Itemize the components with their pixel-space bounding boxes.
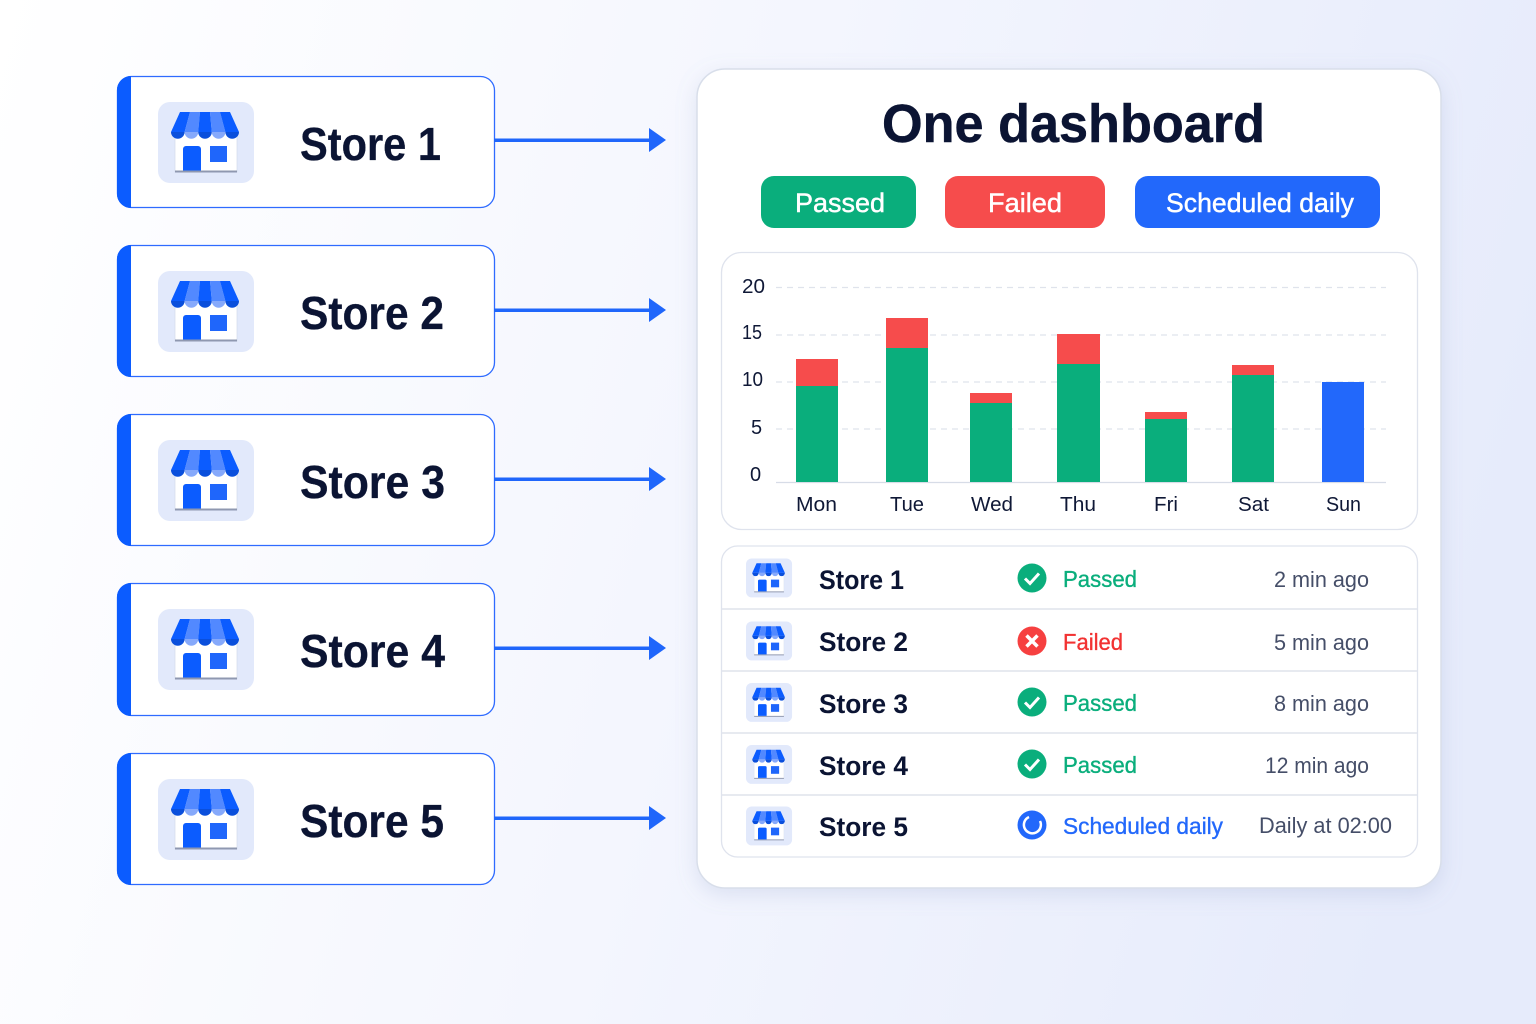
arrow: Store 4 to dashboard — [494, 636, 666, 660]
bars: Fri — [1145, 412, 1187, 482]
x axis labels — [796, 494, 1361, 516]
pill: Scheduled daily — [1135, 176, 1380, 228]
row: Store 3 — [746, 683, 1369, 722]
status table — [722, 546, 1418, 857]
store card: Store 3 — [117, 414, 494, 546]
row: Store 1: Store 1 — [819, 565, 904, 595]
store card: Store 2 — [117, 245, 494, 377]
store card: Store 4 — [117, 583, 494, 716]
row: Store 4: Passed — [1063, 752, 1137, 778]
title: One dashboard — [882, 94, 1265, 154]
x axis labels: Sun — [1326, 494, 1361, 516]
x axis labels: Thu — [1060, 494, 1096, 516]
x axis labels: Sat — [1238, 494, 1269, 516]
x axis labels: Wed — [971, 494, 1013, 516]
y axis labels: 15 — [742, 322, 762, 344]
store card: Store 1 — [117, 76, 494, 208]
y axis labels: 5 — [751, 417, 762, 439]
x axis labels: Tue — [890, 494, 924, 516]
row: Store 1: 2 min ago — [1274, 567, 1369, 592]
row: Store 4: Store 4 — [819, 751, 908, 781]
row: Store 1: Passed — [1063, 566, 1137, 592]
store card: Store 3: Store 3 — [300, 456, 445, 508]
row: Store 5: Daily at 02:00 — [1259, 813, 1392, 838]
arrow: Store 2 to dashboard — [494, 298, 666, 322]
row: Store 2: Failed — [1063, 629, 1123, 655]
row: Store 3: 8 min ago — [1274, 691, 1369, 716]
store card: Store 1: Store 1 — [300, 118, 441, 170]
row: Store 5: Scheduled daily — [1063, 813, 1223, 839]
row: Store 2: Store 2 — [819, 627, 908, 657]
x axis labels: Fri — [1154, 494, 1178, 516]
row: Store 3: Passed — [1063, 690, 1137, 716]
bars: Sat — [1232, 365, 1274, 482]
arrow: Store 1 to dashboard — [494, 128, 666, 152]
row: Store 3: Store 3 — [819, 689, 908, 719]
pill: Passed — [761, 176, 916, 228]
bars: Mon — [796, 359, 838, 482]
y axis labels: 10 — [742, 369, 763, 391]
store card: Store 5 — [117, 753, 494, 885]
store card: Store 5: Store 5 — [300, 795, 444, 847]
y axis labels — [742, 276, 765, 486]
row: Store 4: 12 min ago — [1265, 753, 1369, 778]
pill: Failed: Failed — [988, 188, 1062, 218]
pill: Failed — [945, 176, 1105, 228]
pill: Passed: Passed — [795, 188, 885, 218]
panel: dashboard — [697, 69, 1441, 888]
y axis labels: 20 — [742, 276, 765, 298]
row: Store 5 — [746, 806, 1392, 845]
y axis labels: 0 — [750, 464, 761, 486]
bars: Sun — [1322, 382, 1364, 482]
bars: Wed — [970, 393, 1012, 482]
arrow: Store 3 to dashboard — [494, 467, 666, 491]
bars: Tue — [886, 318, 928, 482]
bars: Thu — [1057, 334, 1100, 482]
bar chart — [722, 252, 1418, 530]
store card: Store 4: Store 4 — [300, 625, 445, 677]
store card: Store 2: Store 2 — [300, 287, 444, 339]
row: Store 2 — [746, 622, 1369, 660]
row: Store 5: Store 5 — [819, 812, 908, 842]
pill: Scheduled daily: Scheduled daily — [1166, 188, 1354, 218]
row: Store 4 — [746, 745, 1369, 784]
row: Store 2: 5 min ago — [1274, 630, 1369, 655]
row: Store 1 — [746, 558, 1369, 597]
arrow: Store 5 to dashboard — [494, 806, 666, 830]
x axis labels: Mon — [796, 494, 837, 516]
